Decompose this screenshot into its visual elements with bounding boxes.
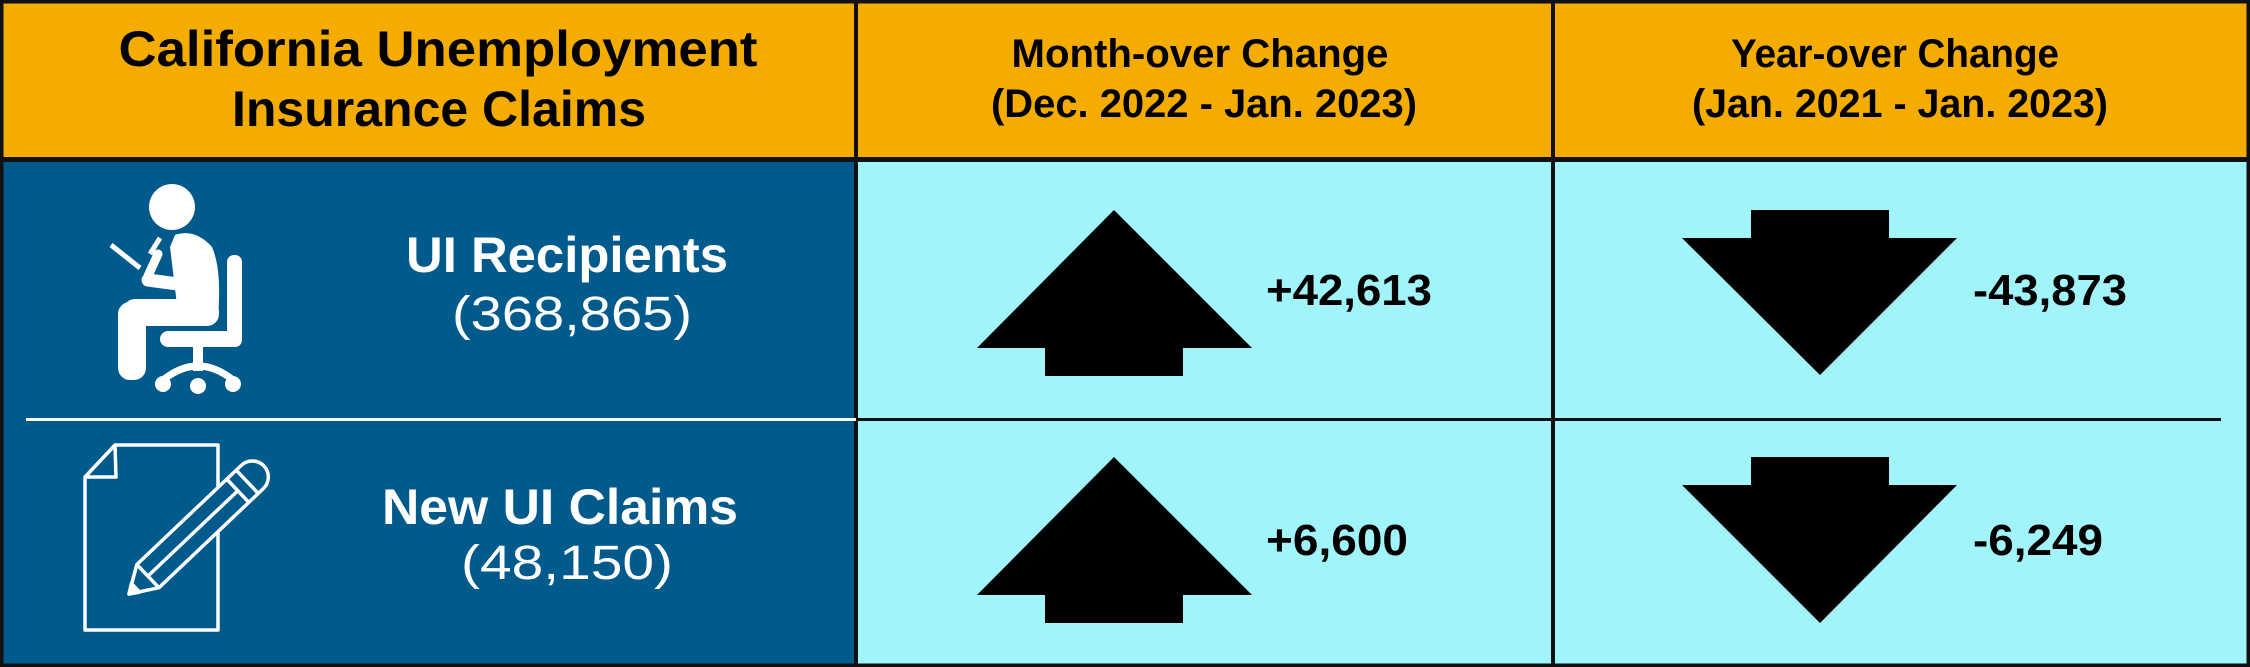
arrow: up new claims month: [977, 457, 1252, 623]
heading: month-over change: (Dec. 2022 - Jan. 2023): [991, 82, 1417, 126]
panel: change values: [856, 160, 2250, 667]
text: UI recipients: UI Recipients: [406, 227, 728, 283]
text: UI recipients: [406, 227, 728, 341]
text: new UI claims: New UI Claims: [382, 479, 738, 535]
title: [118, 21, 758, 137]
heading: month-over change: [991, 32, 1417, 126]
heading: year-over change: (Jan. 2021 - Jan. 2023): [1692, 82, 2108, 126]
title: California Unemployment: [118, 21, 758, 77]
heading: month-over change: Month-over Change: [1012, 32, 1388, 76]
icon: document with pencil: [85, 445, 275, 630]
icon: person seated in chair: [111, 184, 242, 394]
arrow: down recipients year: [1682, 210, 1957, 375]
value: -6,249: -6,249: [1973, 516, 2103, 565]
arrow: up recipients month: [977, 210, 1252, 376]
value: +42,613: +42,613: [1266, 266, 1432, 315]
header band: [0, 0, 2250, 160]
arrow: down new claims year: [1682, 457, 1957, 623]
text: new UI claims: [382, 479, 738, 590]
title: Insurance Claims: [232, 81, 646, 137]
value: +6,600: +6,600: [1266, 516, 1408, 565]
text: new UI claims: (48,150): [461, 537, 673, 590]
text: UI recipients: (368,865): [452, 288, 692, 341]
panel: left labels: [0, 160, 856, 667]
heading: year-over change: Year-over Change: [1731, 32, 2059, 76]
value: -43,873: -43,873: [1973, 266, 2127, 315]
heading: year-over change: [1692, 32, 2108, 126]
